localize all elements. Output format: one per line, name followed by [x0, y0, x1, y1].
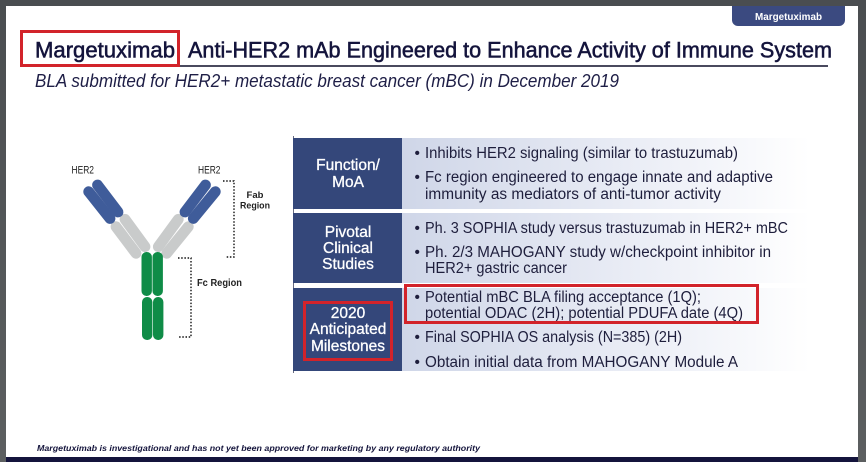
title highlight box — [22, 32, 178, 66]
info table — [293, 136, 810, 373]
row: function / MoA: Fc region engineered to engage innate and adaptive — [425, 169, 773, 186]
Fab region bracket — [223, 181, 270, 257]
section tab — [732, 6, 845, 26]
row: pivotal clinical studies: • — [414, 220, 420, 237]
title: Margetuximab — [35, 38, 175, 62]
row: 2020 anticipated milestones: Final SOPHIA OS analysis (N=385) (2H) — [425, 329, 682, 346]
row: function / MoA: • — [414, 169, 420, 186]
icon: antibody — [89, 185, 215, 340]
row: function / MoA: immunity as mediators of anti-tumor activity — [425, 186, 721, 203]
BLA milestone highlight box — [406, 286, 758, 322]
row: pivotal clinical studies: Ph. 2/3 MAHOGANY study w/checkpoint inhibitor in — [425, 244, 771, 261]
row: pivotal clinical studies — [293, 213, 810, 283]
row: function / MoA — [293, 138, 810, 209]
footnote: Margetuximab is investigational and has not yet been approved for marketing by any regulatory authority — [37, 443, 481, 453]
row: 2020 anticipated milestones: • — [414, 289, 420, 306]
row: function / MoA: Inhibits HER2 signaling (similar to trastuzumab) — [425, 145, 738, 162]
title underline — [178, 65, 828, 67]
row: 2020 anticipated milestones: Obtain initial data from MAHOGANY Module A — [425, 354, 739, 371]
row: 2020 anticipated milestones: Anticipated — [310, 321, 386, 338]
section tab: Margetuximab — [755, 11, 822, 23]
row: 2020 anticipated milestones: Potential mBC BLA filing acceptance (1Q); — [425, 289, 701, 306]
antibody diagram — [72, 164, 270, 340]
row: 2020 anticipated milestones: • — [414, 354, 420, 371]
row: 2020 anticipated milestones: • — [414, 329, 420, 346]
row: function / MoA: MoA — [332, 174, 365, 191]
row: 2020 anticipated milestones — [293, 288, 810, 371]
Fab region bracket: Fab — [247, 190, 264, 201]
Fc region bracket: Fc Region — [197, 278, 242, 289]
row: 2020 anticipated milestones: 2020 — [331, 305, 366, 322]
milestone label highlight box — [304, 302, 392, 360]
row: 2020 anticipated milestones: Milestones — [311, 338, 385, 355]
row: 2020 anticipated milestones: potential ODAC (2H); potential PDUFA date (4Q) — [425, 305, 743, 322]
HER2 labels — [72, 164, 220, 176]
row: pivotal clinical studies: Pivotal — [325, 224, 371, 241]
row: pivotal clinical studies: Studies — [322, 256, 374, 273]
subtitle: BLA submitted for HER2+ metastatic breast cancer (mBC) in December 2019 — [35, 71, 619, 91]
Fc region bracket — [178, 258, 242, 337]
row: pivotal clinical studies: HER2+ gastric cancer — [425, 260, 567, 277]
row: pivotal clinical studies: Ph. 3 SOPHIA study versus trastuzumab in HER2+ mBC — [425, 220, 788, 237]
row: pivotal clinical studies: Clinical — [323, 240, 373, 257]
table left rule — [293, 136, 294, 373]
HER2 labels: HER2 — [198, 164, 220, 176]
title: Anti-HER2 mAb Engineered to Enhance Activity of Immune System — [188, 38, 832, 62]
row: pivotal clinical studies: • — [414, 244, 420, 261]
Fab region bracket: Region — [240, 200, 270, 212]
row: function / MoA: Function/ — [316, 157, 381, 174]
HER2 labels: HER2 — [72, 164, 94, 176]
row: function / MoA: • — [414, 145, 420, 162]
